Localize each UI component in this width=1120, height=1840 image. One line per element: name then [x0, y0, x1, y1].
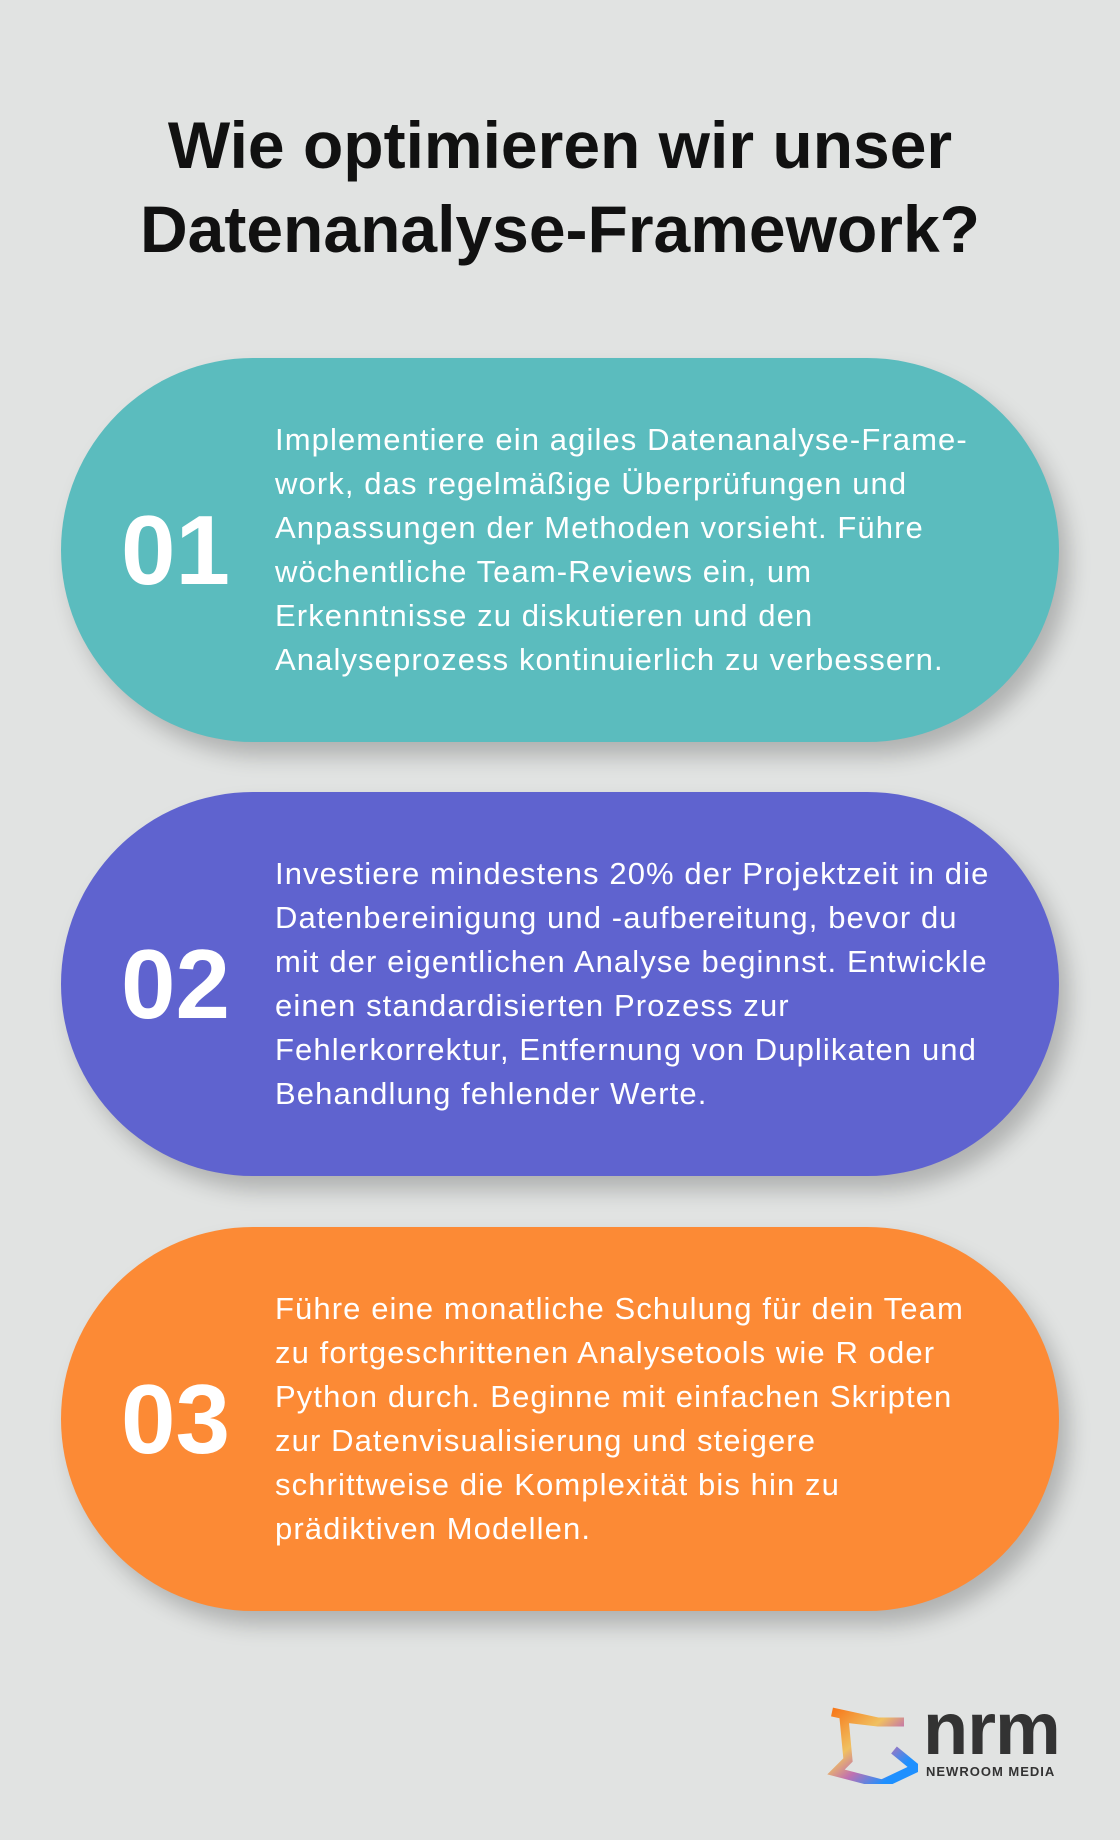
logo: NEWROOM MEDIA [926, 1764, 1055, 1779]
number 02: 02 [121, 929, 230, 1039]
text 03: Führe eine monatliche Schulung für dein Team [275, 1291, 964, 1326]
text 03: zur Datenvisualisierung und steigere [275, 1423, 816, 1458]
panel: step 03 [61, 1227, 1059, 1611]
panel: step 02 [61, 792, 1059, 1176]
text 01: Erkenntnisse zu diskutieren und den [275, 598, 813, 633]
logo text: nrm [923, 1687, 1060, 1770]
text 02: Investiere mindestens 20% der Projektzeit in die [275, 856, 989, 891]
title: Wie optimieren wir unser [168, 108, 952, 182]
text 01: Analyseprozess kontinuierlich zu verbessern. [275, 642, 944, 677]
icon: logo mark [827, 1708, 918, 1784]
text 03 [275, 1291, 964, 1546]
text 02: mit der eigentlichen Analyse beginnst. Entwickle [275, 944, 988, 979]
text 01: work, das regelmäßige Überprüfungen und [275, 466, 907, 501]
text 03: prädiktiven Modellen. [275, 1511, 591, 1546]
title [140, 108, 980, 266]
panel: step 01 [61, 358, 1059, 742]
text 02: einen standardisierten Prozess zur [275, 988, 790, 1023]
text 01: Anpassungen der Methoden vorsieht. Führe [275, 510, 924, 545]
text 02 [275, 856, 989, 1111]
text 01: wöchentliche Team-Reviews ein, um [275, 554, 812, 589]
text 03: Python durch. Beginne mit einfachen Skripten [275, 1379, 952, 1414]
text 01 [275, 422, 968, 677]
number 03: 03 [121, 1364, 230, 1474]
text 02: Fehlerkorrektur, Entfernung von Duplikaten und [275, 1032, 977, 1067]
title: Datenanalyse-Framework? [140, 192, 980, 266]
number 01: 01 [121, 495, 230, 605]
text 01: Implementiere ein agiles Datenanalyse-Frame- [275, 422, 968, 457]
text 03: schrittweise die Komplexität bis hin zu [275, 1467, 840, 1502]
text 03: zu fortgeschrittenen Analysetools wie R oder [275, 1335, 935, 1370]
logo [827, 1687, 1060, 1784]
text 02: Datenbereinigung und -aufbereitung, bevor du [275, 900, 958, 935]
text 02: Behandlung fehlender Werte. [275, 1076, 707, 1111]
